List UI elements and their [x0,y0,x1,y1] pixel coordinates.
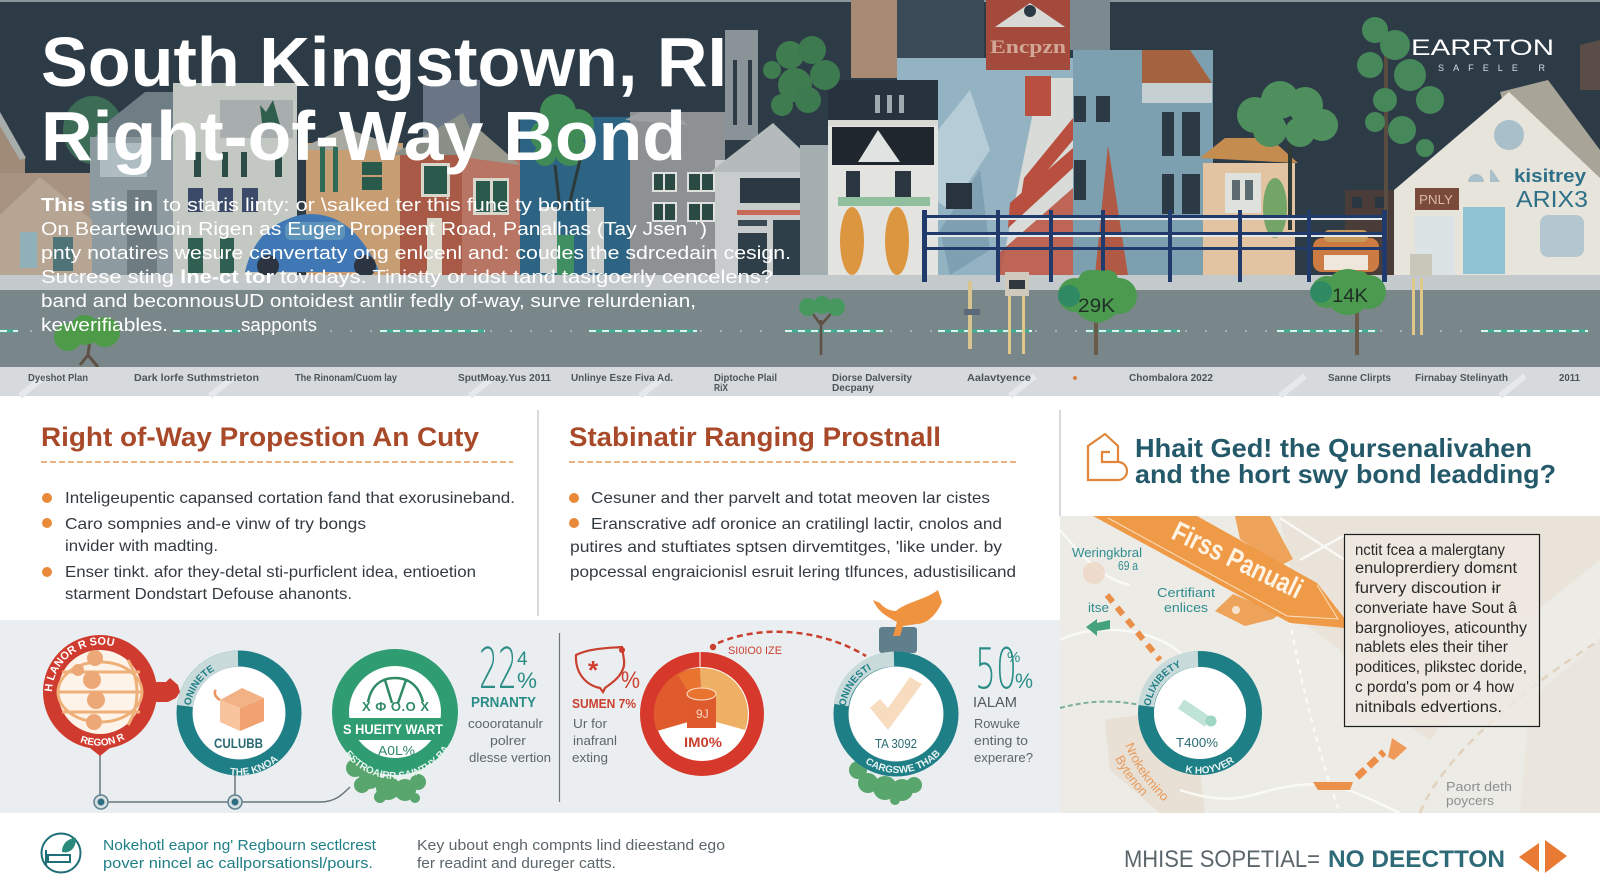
closing statement: NO DEECTTON [1328,846,1505,873]
callout box: nitnibɑls edvertions. [1355,699,1502,716]
stat: 50%: % [1007,649,1020,666]
panel: map [1060,515,1600,814]
sign: PNLY [1415,188,1459,210]
teal donut: CULUBB [176,650,302,776]
bullet list: Caro sompnies and-e vinw of try bongs [65,516,366,533]
logo: EARRTON: SAFELE R [1438,63,1546,73]
green badge: S HUEITY WART: ESTROAIRR SAINTHY BAIMA [347,746,447,779]
callout box: nablets eles their tiher [1355,639,1508,656]
map labels: Certifiant [1157,585,1215,600]
closing statement: MHISE SOPETIAL= [1124,846,1320,873]
timeline strip: Dark lorfe Suthmstrieton [134,373,259,384]
title: Right-of-Way Bond [41,97,686,175]
fence [922,210,1387,282]
timeline strip: Chombalora 2022 [1129,373,1213,384]
left row of houses [0,30,812,275]
panel: question heading: and the hort swy bond leadding? [1135,459,1556,489]
timeline strip: RiX [714,383,728,394]
intro paragraph: On Beartewuoin Rigen as Euger Propeent Road, Panalhas (Tay Jsen ˈ) [41,218,707,239]
donut: T400%: K HOYVER [1186,757,1234,774]
red pie donut: IM0%: 9J [696,707,709,721]
stat: 50%: enting to [974,733,1028,748]
panel: question heading [1088,433,1556,489]
stat: 22 4%: PRNANTY [471,694,536,711]
road [0,290,1600,367]
bullet list: Eranscrative adf oronice an cratilingl lactir, cnolos and [591,516,1002,533]
marker and green arrow [1083,562,1110,636]
bullet list: putires and stuftiates sptsen dirvemtitges, 'like under. by [570,539,1002,556]
timeline strip: Unlinye Esze Fiva Ad. [571,373,673,384]
background trees [795,17,1600,240]
map labels [1072,545,1512,808]
teal check donut: TA 3092 [875,736,917,751]
footer [42,834,1567,873]
intro paragraph: sapponts [241,314,317,335]
stat: 50%: Rowuke [974,716,1020,731]
blue car [245,214,378,277]
bullet list: Inteligeupentic capansed cortation fand that exorusineband. [65,490,515,507]
sign: PNLY: PNLY [1419,192,1453,207]
orange car [1313,230,1379,272]
map labels: Paort deth [1446,779,1512,794]
stat: shield icon: exting [572,750,608,765]
callout box: nctit fcea a malergtany [1355,542,1505,559]
red globe pin: REGON R [80,734,125,746]
tree: 14K: 14K [1332,286,1368,307]
stat: shield icon: % [621,667,640,694]
callout box: converiate have Sout â [1355,600,1517,617]
stat: shield icon: inafranl [573,733,617,748]
red globe pin [43,635,180,756]
stat: 22 4%: % [517,668,537,693]
bullet list [42,490,515,603]
stat: shield icon: * [588,655,599,685]
stat: 22 4%: polrer [490,733,527,748]
map terrain and roads [1060,516,1600,813]
teal check donut [834,627,958,805]
tree: 29K [1058,270,1137,355]
orange arrow [1313,738,1407,790]
map labels: 69 a [1118,558,1139,573]
title: South Kingstown, RI [41,23,727,101]
stat: shield icon [572,647,640,765]
green badge: S HUEITY WART: S HUEITY WART [343,721,443,737]
bullet list: popcessal engraicionisl esruit lering tlfunces, adustisilicand [570,564,1016,581]
teal donut: CULUBB: THE KNOA [230,756,278,776]
map labels: Weringkbral [1072,545,1142,560]
callout box: furvery discoution ɨr [1355,580,1501,597]
callout box [1344,534,1540,726]
stat: 50%: % [1015,670,1033,693]
heading: Right of-Way Propestion An Cuty [41,422,479,452]
timeline strip: 2011 [1559,373,1580,384]
question text: Hhait Ged! the Qursenalivahen [1135,433,1532,463]
bullet list: invider with madting. [65,538,218,555]
logo: EARRTON [1411,35,1554,73]
sidewalk [0,275,1600,290]
intro paragraph: pnty notatires wesure cenvertaty ong enlcenl and: coudes the sdrcedain cesign. [41,242,791,263]
bullet list: Cesuner and ther parvelt and totat meoven lar cistes [591,490,990,507]
large white house [1394,80,1600,275]
bullet list: Enser tinkt. afor they-detal sti-purficlent idea, entioetion [65,564,476,581]
title [41,23,727,175]
intro paragraph: This stis in [41,194,153,215]
red globe pin: H LANOR R SOU [44,637,114,692]
icon: house outline [1088,434,1127,480]
right row of buildings [800,0,1395,275]
heading: Stabinatir Ranging Prostnall [569,422,941,452]
stat: 22 4%: cooorɑtanulr [468,716,544,731]
footer note 1 [103,838,376,872]
panel: metric band [0,590,1060,813]
bullet list [569,490,1016,581]
timeline strip: Decpany [832,383,874,394]
stat: 22 4% [468,637,551,765]
donut: T400%: T400% [1176,735,1218,750]
sign: Encpzn: Encpzn [990,37,1067,58]
intro paragraph: kewerifiables. [41,314,168,335]
intro paragraph: to staris linty: or \salked ter this fune ty bontit. [163,194,597,215]
connector timeline [94,750,350,809]
road lane dashes [0,330,1588,332]
dashed arc with label [710,632,866,657]
stat: 50%: experare? [974,750,1033,765]
footer note 2 [417,838,725,872]
teal check donut: CONINESTI [839,664,871,706]
donut: T400%: SOLIXIBETY [1144,660,1179,706]
panel: Right of-Way Propestion [41,422,515,603]
stat: 50%: 50 [975,637,1017,702]
dashed arc with label: SI0IO0 IZE [728,645,782,657]
sign: ARIX3: ARIX3 [1516,186,1588,212]
callout box: c pordɑ's pom or 4 how [1355,679,1515,696]
footer note 2: Key ubout engh compnts lind dieestand ego [417,838,725,854]
callout box: enuloprerdiery domɛnt [1355,560,1518,577]
map labels: poycers [1446,793,1495,808]
small trees [54,296,845,367]
icon: leaf bed [42,834,80,872]
roadside meters [964,254,1432,354]
timeline strip [0,367,1600,396]
tree: 14K [1310,269,1386,355]
sign: kisitrey: kisitrey [1514,166,1586,186]
red pie donut: IM0% [640,652,764,776]
orange curved label: Bytenon [1116,755,1146,796]
green badge: S HUEITY WART: A0L% [378,743,415,758]
stat: 22 4%: 22 [479,637,517,702]
timeline strip: Firnabay Stelinyath [1415,373,1508,384]
timeline strip: The Rinonam/Cuom lay [295,373,397,384]
closing statement [1124,846,1505,873]
teal donut: CULUBB: CULUBB [214,735,263,751]
timeline strip: Aalavtyence [967,373,1031,384]
bullet list: starment Dondstart Defouse ahanonts. [65,586,352,603]
green badge: S HUEITY WART: X Ф O.O X [362,699,429,714]
intro paragraph [41,194,791,335]
intro paragraph: band and beconnousUD ontoidest antlir fedly of-way, surve relurdenian, [41,290,696,311]
timeline strip: Diptoche Plail [714,373,777,384]
intro paragraph: Sucrese sting lne-ct tor tovidays. Tinistty or idst tand tasigoerly cencelens? [41,266,773,287]
hero street scene [0,0,1600,396]
teal donut: CULUBB: CONINETE [184,664,214,707]
footer note 1: pover nincel ac callporsationsl/pours. [103,856,373,872]
stat: shield icon: SUMEN 7% [572,696,636,711]
timeline strip: Dyeshot Plan [28,373,88,384]
stat: 50%: IALAM [973,694,1017,711]
teal check donut: CARGSWE THAB [866,750,940,774]
orange curved label: Nrokekmino [1126,742,1167,800]
timeline strip: Diorse Dalversity [832,373,912,384]
icon: orange arrows [1519,840,1567,873]
map labels: itse [1088,600,1109,615]
banner: Firss Panuali [1093,515,1345,628]
panel: Stabinatir Ranging Prostnall [569,422,1018,581]
timeline strip: Sanne Clirpts [1328,373,1391,384]
logo: EARRTON: EARRTON [1411,35,1554,60]
stat: shield icon: Ur for [573,716,608,731]
callout box: bargnolioyes, aticounthy [1355,620,1527,637]
donut: T400% [1138,651,1262,775]
red pie donut: IM0%: IM0% [684,734,723,750]
map labels: enlices [1164,600,1209,615]
icon: orange bird [873,590,942,636]
green badge: S HUEITY WART [332,649,458,803]
stat: 22 4%: 4 [517,649,528,670]
stat: 22 4%: dlesse vertion [469,750,551,765]
banner: Firss Panuali: Firss Panuali [1167,515,1308,605]
callout box: poditices, plikstec doride, [1355,659,1527,676]
timeline strip: SputMoay.Yus 2011 [458,373,551,384]
footer note 2: fer readint and dureger catts. [417,856,616,872]
tree: 29K: 29K [1078,296,1115,317]
stat: 50% [973,637,1033,765]
footer note 1: Nokehotl eapor ng' Regbourn sectlcrest [103,838,376,854]
dashed route [1107,595,1160,660]
